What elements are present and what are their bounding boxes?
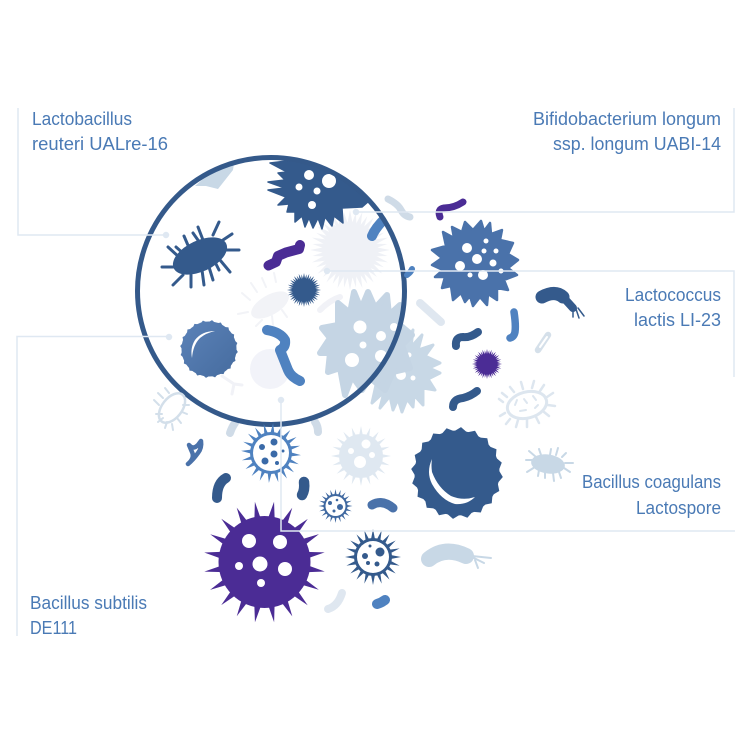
blue zigzag	[188, 441, 201, 464]
faint microbes inside lens	[222, 207, 393, 394]
label: Lactobacillus reuteri UALre-16	[32, 109, 168, 154]
dark worm upper	[456, 332, 478, 346]
label: Lactobacillus reuteri UALre-16: Lactobacillus	[32, 109, 132, 129]
label: Lactococcus lactis LI-23: lactis LI-23	[634, 310, 721, 330]
small ring microbe	[318, 489, 352, 523]
leader line: Bacillus coagulans	[278, 398, 735, 531]
label: Bacillus coagulans Lactospore	[582, 472, 721, 518]
label: Bacillus coagulans Lactospore: Lactospore	[636, 498, 721, 518]
pale curved rod	[328, 593, 342, 609]
pale capsule	[538, 335, 548, 350]
dark bacillus with flagella	[542, 294, 584, 318]
blue worm	[267, 330, 300, 381]
label: Bifidobacterium longum ssp. longum UABI-14: ssp. longum UABI-14	[553, 134, 721, 154]
dark spiky microbe	[267, 160, 368, 230]
small blue rod at ring	[407, 269, 412, 275]
label: Bacillus subtilis DE111	[30, 593, 147, 638]
leader line: Lactobacillus reuteri	[18, 108, 168, 238]
label: Bacillus coagulans Lactospore: Bacillus coagulans	[582, 472, 721, 492]
large purple spiky microbe	[195, 492, 334, 632]
pale microbe, rear	[372, 327, 440, 412]
blue arc	[372, 503, 393, 508]
label: Lactococcus lactis LI-23	[625, 285, 721, 330]
pale outlined bacterium right	[499, 381, 555, 427]
blue rod	[372, 214, 390, 236]
label: Bifidobacterium longum ssp. longum UABI-14	[533, 109, 721, 154]
microbes clipped inside lens	[195, 150, 390, 236]
blue spiky microbe	[432, 221, 518, 306]
lens ring	[138, 158, 404, 424]
pale bacterium with pili	[526, 448, 573, 481]
dark bacterium with pili	[162, 222, 239, 287]
label: Bacillus subtilis DE111: Bacillus subtilis	[30, 593, 147, 613]
dark ring microbe	[345, 529, 401, 585]
pale rods behind lens	[230, 199, 441, 433]
label: Bifidobacterium longum ssp. longum UABI-14: Bifidobacterium longum	[533, 109, 721, 129]
dark worm lower	[453, 391, 477, 407]
label: Lactococcus lactis LI-23: Lactococcus	[625, 285, 721, 305]
blue bean	[377, 600, 385, 604]
leader line: Lactococcus lactis	[324, 268, 734, 377]
pale spiky microbe	[331, 426, 391, 486]
small dark spiky microbe	[286, 272, 322, 308]
round blue cell	[177, 317, 241, 381]
pale outlined bacterium left	[154, 388, 190, 430]
pale clipped blob	[195, 166, 234, 189]
blue rod right	[510, 312, 515, 338]
light blue ring microbe	[239, 421, 303, 485]
dark bean left	[217, 478, 226, 498]
pale microbe, large	[320, 292, 412, 395]
label: Lactobacillus reuteri UALre-16: reuteri UALre-16	[32, 134, 168, 154]
purple fine spiky microbe	[471, 348, 503, 380]
label: Bacillus subtilis DE111: DE111	[30, 618, 77, 638]
pale bacillus with flagella	[429, 552, 491, 568]
leader line: Bifidobacterium longum	[354, 108, 734, 214]
purple worm outside	[439, 202, 463, 217]
leader line: Bacillus subtilis	[17, 334, 172, 636]
dark bean right	[302, 482, 304, 495]
purple worm	[268, 245, 300, 266]
large dark cell with crescent	[407, 423, 507, 523]
